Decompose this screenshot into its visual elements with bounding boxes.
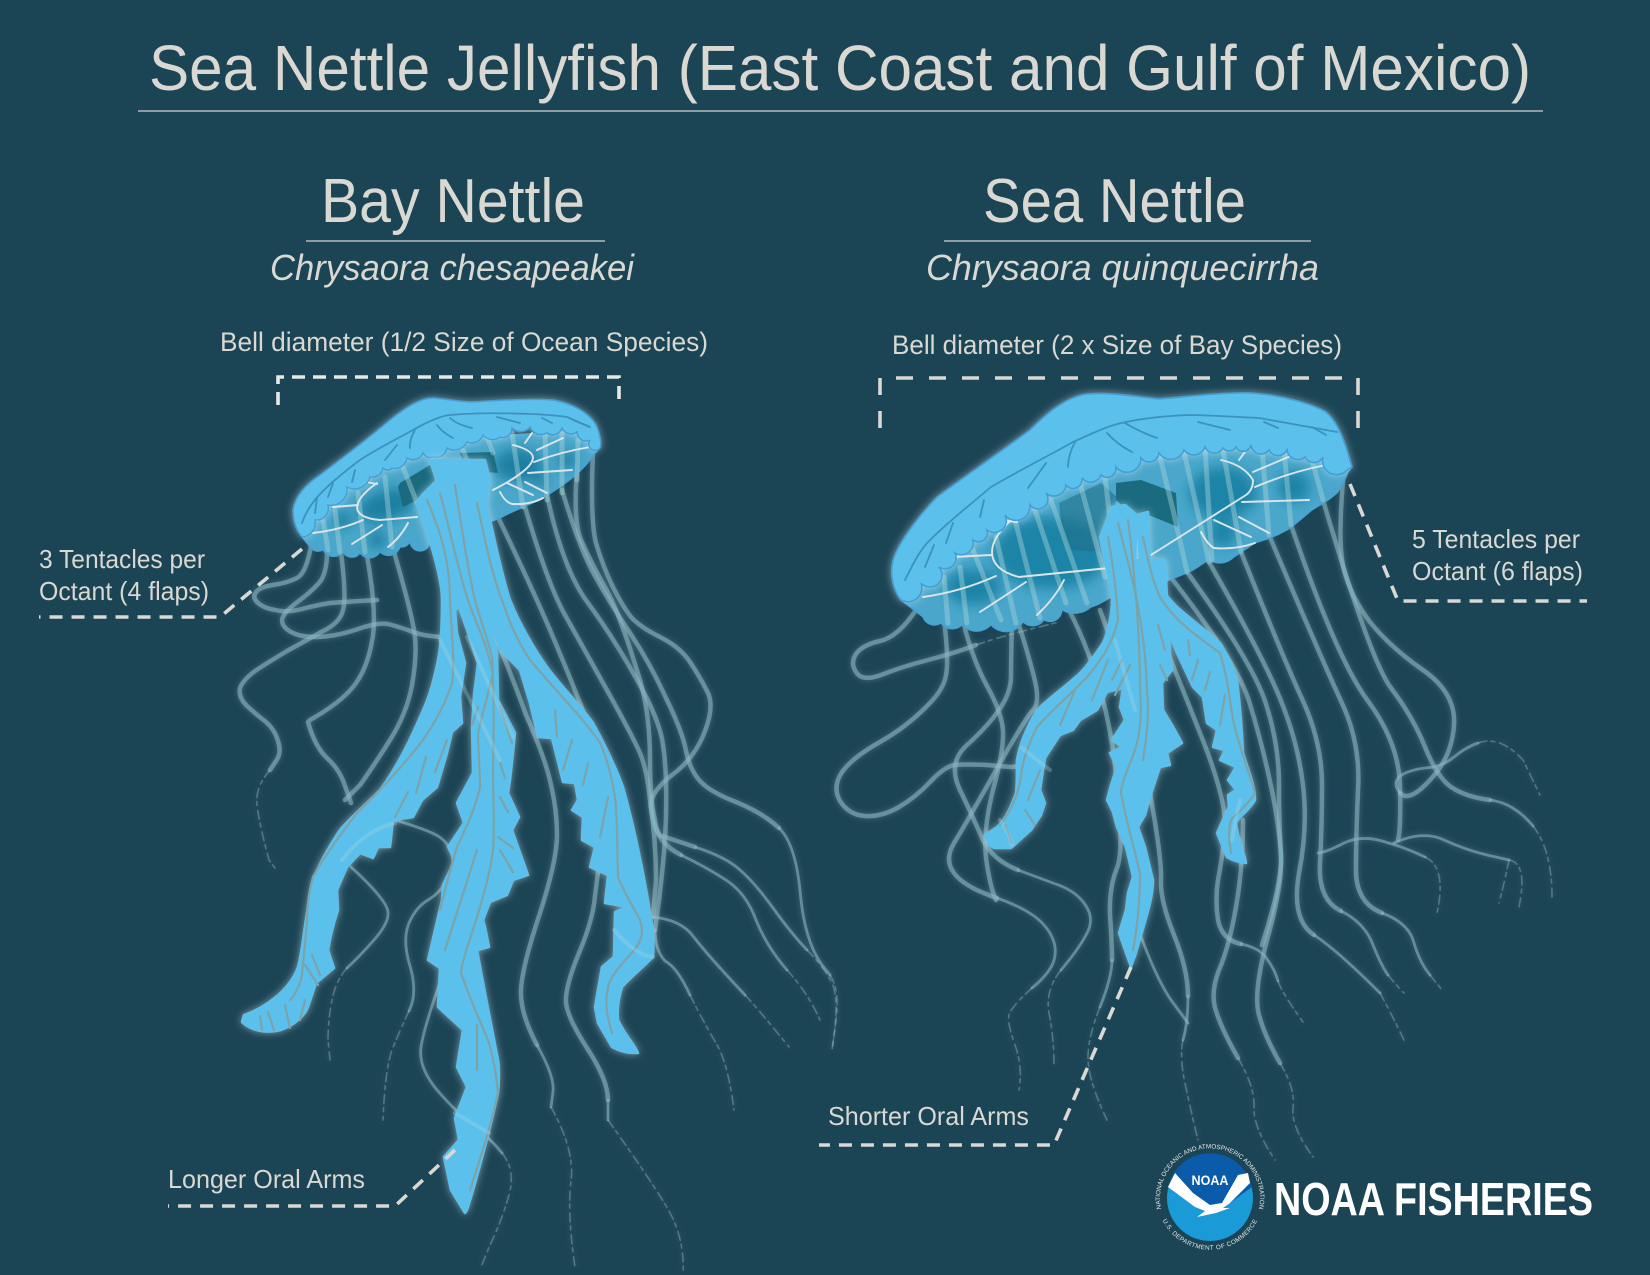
callout: tentacles per octant (bay): Octant (4 flaps) [39, 576, 209, 606]
callout: tentacles per octant (sea): Octant (6 flaps) [1412, 556, 1583, 586]
icon: NOAA seal: NOAA [1192, 1172, 1228, 1188]
callout: tentacles per octant (bay): 3 Tentacles per [39, 544, 205, 574]
arm veins: bay nettle [260, 485, 642, 1190]
panel: bay nettle [39, 167, 837, 1275]
oral arm: left [985, 505, 1137, 848]
bracket: bell diameter [278, 377, 619, 405]
callout: tentacles per octant (bay) [39, 544, 302, 617]
callout: longer oral arms [168, 1150, 455, 1206]
callout: longer oral arms: Longer Oral Arms [168, 1164, 365, 1194]
bracket: bell diameter [880, 378, 1358, 428]
tentacles over arms: sea nettle [1000, 640, 1240, 845]
species name: Chrysaora chesapeakei: Chrysaora chesapeakei [270, 247, 635, 288]
label: bell diameter: Bell diameter (2 x Size of Bay Species) [892, 330, 1342, 360]
bell: bay nettle [293, 398, 601, 537]
heading: Sea Nettle: Sea Nettle [983, 167, 1246, 236]
oral arm: right [477, 470, 653, 1053]
panel: sea nettle [819, 167, 1587, 1160]
subumbrella: bay nettle [302, 430, 600, 558]
species name: Chrysaora quinquecirrha: Chrysaora quinquecirrha [926, 247, 1319, 288]
jellyfish illustration: bay nettle [240, 398, 837, 1275]
oral arms: sea nettle [985, 505, 1255, 967]
subumbrella: sea nettle [901, 440, 1352, 632]
icon: NOAA seal: NATIONAL OCEANIC AND ATMOSPHERIC ADMINISTRATION [1156, 1144, 1264, 1210]
oral arms: bay nettle [242, 460, 653, 1213]
icon: NOAA seal [1156, 1144, 1264, 1250]
tentacles over arms: bay nettle [342, 637, 653, 1133]
tentacles: bay nettle [240, 450, 837, 1275]
callout: tentacles per octant (sea) [1350, 484, 1587, 601]
bell: sea nettle [892, 393, 1352, 602]
oral arm: left [242, 460, 490, 1032]
oral arm: middle [428, 470, 528, 1213]
heading: Bay Nettle: Bay Nettle [321, 167, 585, 236]
icon: NOAA seal: U.S. DEPARTMENT OF COMMERCE [1163, 1218, 1258, 1250]
callout: tentacles per octant (sea): 5 Tentacles per [1412, 524, 1580, 554]
logo: NOAA Fisheries [1156, 1144, 1593, 1250]
title: Sea Nettle Jellyfish (East Coast and Gulf of Mexico) [149, 32, 1531, 104]
oral arm: middle [1107, 560, 1182, 967]
jellyfish illustration: sea nettle [836, 393, 1552, 1160]
oral arm: right [1137, 512, 1255, 863]
callout: shorter oral arms: Shorter Oral Arms [828, 1101, 1029, 1131]
arm veins: sea nettle [1000, 520, 1255, 950]
label: bell diameter: Bell diameter (1/2 Size of Ocean Species) [220, 327, 708, 357]
tentacles: sea nettle [836, 470, 1552, 1160]
callout: shorter oral arms [819, 967, 1131, 1145]
